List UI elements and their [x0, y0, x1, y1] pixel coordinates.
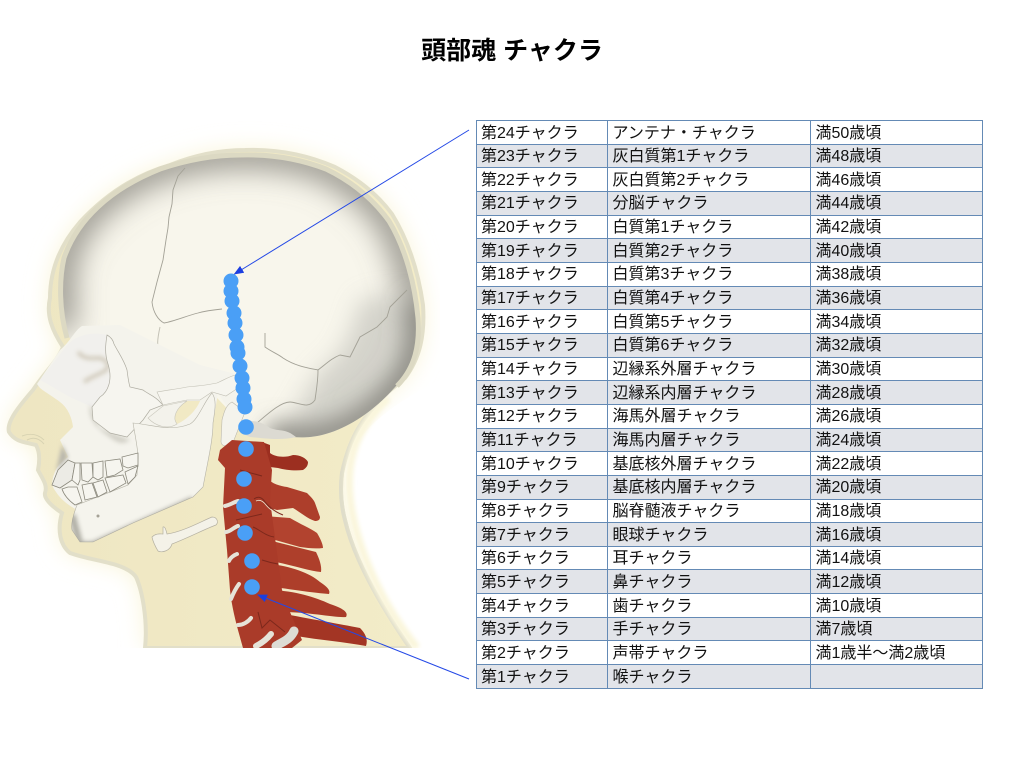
row 5: 第5チャクラ [481, 574, 570, 591]
row 19: 第19チャクラ [481, 243, 579, 260]
row 22: 第22チャクラ [481, 172, 579, 189]
row 20: 白質第1チャクラ [612, 219, 733, 236]
row 17: 第17チャクラ [481, 290, 579, 307]
chakra table [476, 120, 983, 689]
row 12 [481, 407, 881, 425]
skull sutures [152, 168, 407, 423]
row 6: 第6チャクラ [481, 550, 570, 567]
zygomatic arch [157, 375, 238, 405]
row 21 [477, 192, 982, 215]
row 20: 満42歳頃 [816, 219, 881, 236]
row 4: 歯チャクラ [612, 598, 692, 615]
row 3: 第3チャクラ [481, 621, 570, 638]
connector line: 第24チャクラ [234, 130, 469, 274]
row 23: 満48歳頃 [816, 148, 881, 165]
row 19: 満40歳頃 [816, 243, 881, 260]
row 3 [477, 618, 982, 640]
row 6 [481, 549, 881, 567]
row 12: 海馬外層チャクラ [612, 408, 740, 425]
nasal bone plane [40, 334, 110, 407]
row 4: 満10歳頃 [816, 598, 881, 615]
zygomatic bone [92, 335, 163, 437]
row 10 [481, 455, 881, 473]
row 5 [477, 570, 982, 593]
row 7: 満16歳頃 [816, 527, 881, 544]
row 10: 満22歳頃 [816, 456, 881, 473]
row 20: 第20チャクラ [481, 219, 579, 236]
skin and neck [9, 150, 423, 648]
row 23: 灰白質第1チャクラ [612, 148, 749, 165]
row 9: 基底核内層チャクラ [612, 479, 756, 496]
nose fold [22, 434, 44, 444]
row 7: 第7チャクラ [481, 527, 570, 544]
row 3: 手チャクラ [612, 621, 692, 638]
row 13: 満28歳頃 [816, 385, 881, 402]
row 4 [481, 597, 881, 615]
row 1: 喉チャクラ [612, 669, 692, 686]
intervertebral discs [225, 501, 294, 646]
row 5: 鼻チャクラ [612, 574, 692, 591]
title: 頭部魂 チャクラ [421, 36, 603, 64]
row 17: 白質第4チャクラ [612, 290, 733, 307]
spinous process C5 [276, 542, 322, 572]
row 13: 第13チャクラ [481, 385, 579, 402]
row 1 [477, 665, 982, 688]
row 5: 満12歳頃 [816, 574, 881, 591]
row 10: 第10チャクラ [481, 456, 579, 473]
row 4: 第4チャクラ [481, 598, 570, 615]
row 15: 満32歳頃 [816, 337, 881, 354]
row 8: 脳脊髄液チャクラ [612, 503, 740, 520]
hyoid bone [152, 517, 217, 552]
styloid process [221, 402, 245, 446]
row 24: 満50歳頃 [816, 124, 881, 142]
spinous process C3 [270, 482, 320, 521]
row 2: 第2チャクラ [481, 645, 570, 662]
spinous process T1 [291, 615, 367, 646]
row 10: 基底核外層チャクラ [612, 456, 756, 473]
vertebra gap lines [236, 470, 285, 632]
row 24: アンテナ・チャクラ [612, 124, 756, 142]
row 12: 第12チャクラ [481, 408, 579, 425]
row 22 [481, 171, 881, 189]
row 9: 第9チャクラ [481, 479, 570, 496]
row 16: 満34歳頃 [816, 314, 881, 331]
row 17: 満36歳頃 [816, 290, 881, 307]
lacrimal streak [78, 352, 108, 382]
maxilla shading [56, 440, 68, 472]
spinous process C7 [282, 590, 347, 618]
row 18: 第18チャクラ [481, 266, 579, 283]
row 3: 満7歳頃 [816, 621, 872, 638]
row 18 [481, 265, 881, 283]
row 18: 満38歳頃 [816, 266, 881, 283]
row 19: 白質第2チャクラ [612, 243, 733, 260]
row 9 [477, 476, 982, 499]
row 7 [477, 523, 982, 546]
mandible [72, 393, 215, 542]
row 11: 第11チャクラ [481, 432, 577, 449]
spinous process C2 [262, 442, 308, 470]
row 12: 満26歳頃 [816, 408, 881, 425]
row 13 [477, 381, 982, 404]
cervical vertebrae [218, 440, 367, 648]
row 23: 第23チャクラ [481, 148, 579, 165]
spinous process C4 [272, 516, 323, 548]
rear neck white glow [345, 475, 346, 476]
row 20 [481, 218, 881, 236]
head glow [9, 150, 423, 648]
mandible shading [72, 500, 193, 545]
row 1: 第1チャクラ [481, 669, 570, 686]
chakra markers [224, 274, 260, 595]
row 18: 白質第3チャクラ [612, 266, 733, 283]
row 23 [477, 145, 982, 167]
row 15: 第15チャクラ [481, 337, 579, 354]
row 11 [477, 429, 982, 451]
row 21: 分脳チャクラ [612, 195, 708, 212]
row 2 [481, 644, 945, 662]
row 15 [477, 334, 982, 357]
cranium [58, 152, 421, 440]
spinous process C6 [278, 565, 330, 594]
row 9: 満20歳頃 [816, 479, 881, 496]
row 6: 満14歳頃 [816, 550, 881, 567]
row 14: 辺縁系外層チャクラ [612, 361, 756, 378]
vertebral column [218, 440, 302, 648]
facial bones [37, 325, 296, 552]
row 7: 眼球チャクラ [612, 527, 708, 544]
row 2: 満1歳半〜満2歳頃 [816, 645, 945, 662]
sphenoid ridge [157, 327, 160, 344]
row 16: 白質第5チャクラ [612, 314, 733, 331]
row 22: 満46歳頃 [816, 172, 881, 189]
teeth [52, 453, 138, 505]
row 19 [477, 239, 982, 262]
row 14: 満30歳頃 [816, 361, 881, 378]
row 16: 第16チャクラ [481, 314, 579, 331]
cranium rim [61, 155, 418, 386]
connector line: 第1チャクラ [258, 595, 469, 679]
row 24 [481, 124, 881, 142]
row 2: 声帯チャクラ [612, 645, 708, 662]
row 11: 満24歳頃 [816, 432, 881, 449]
row 14 [481, 360, 881, 378]
row 16 [481, 313, 881, 331]
row 24: 第24チャクラ [481, 124, 579, 142]
row 14: 第14チャクラ [481, 361, 579, 378]
row 11: 海馬内層チャクラ [612, 432, 740, 449]
anatomical illustration with chakra markers [3, 130, 470, 680]
coronoid process [148, 401, 187, 427]
zygomatic arch gap [175, 401, 200, 424]
row 13: 辺縁系内層チャクラ [612, 385, 756, 402]
row 17 [477, 287, 982, 309]
row 8 [481, 502, 881, 520]
row 8: 満18歳頃 [816, 503, 881, 520]
row 15: 白質第6チャクラ [612, 337, 733, 354]
mastoid base [241, 421, 296, 439]
row 6: 耳チャクラ [612, 550, 692, 567]
head illustration [9, 150, 460, 648]
row 22: 灰白質第2チャクラ [612, 172, 749, 189]
row 21: 満44歳頃 [816, 195, 881, 212]
row 21: 第21チャクラ [481, 195, 579, 212]
row 8: 第8チャクラ [481, 503, 570, 520]
